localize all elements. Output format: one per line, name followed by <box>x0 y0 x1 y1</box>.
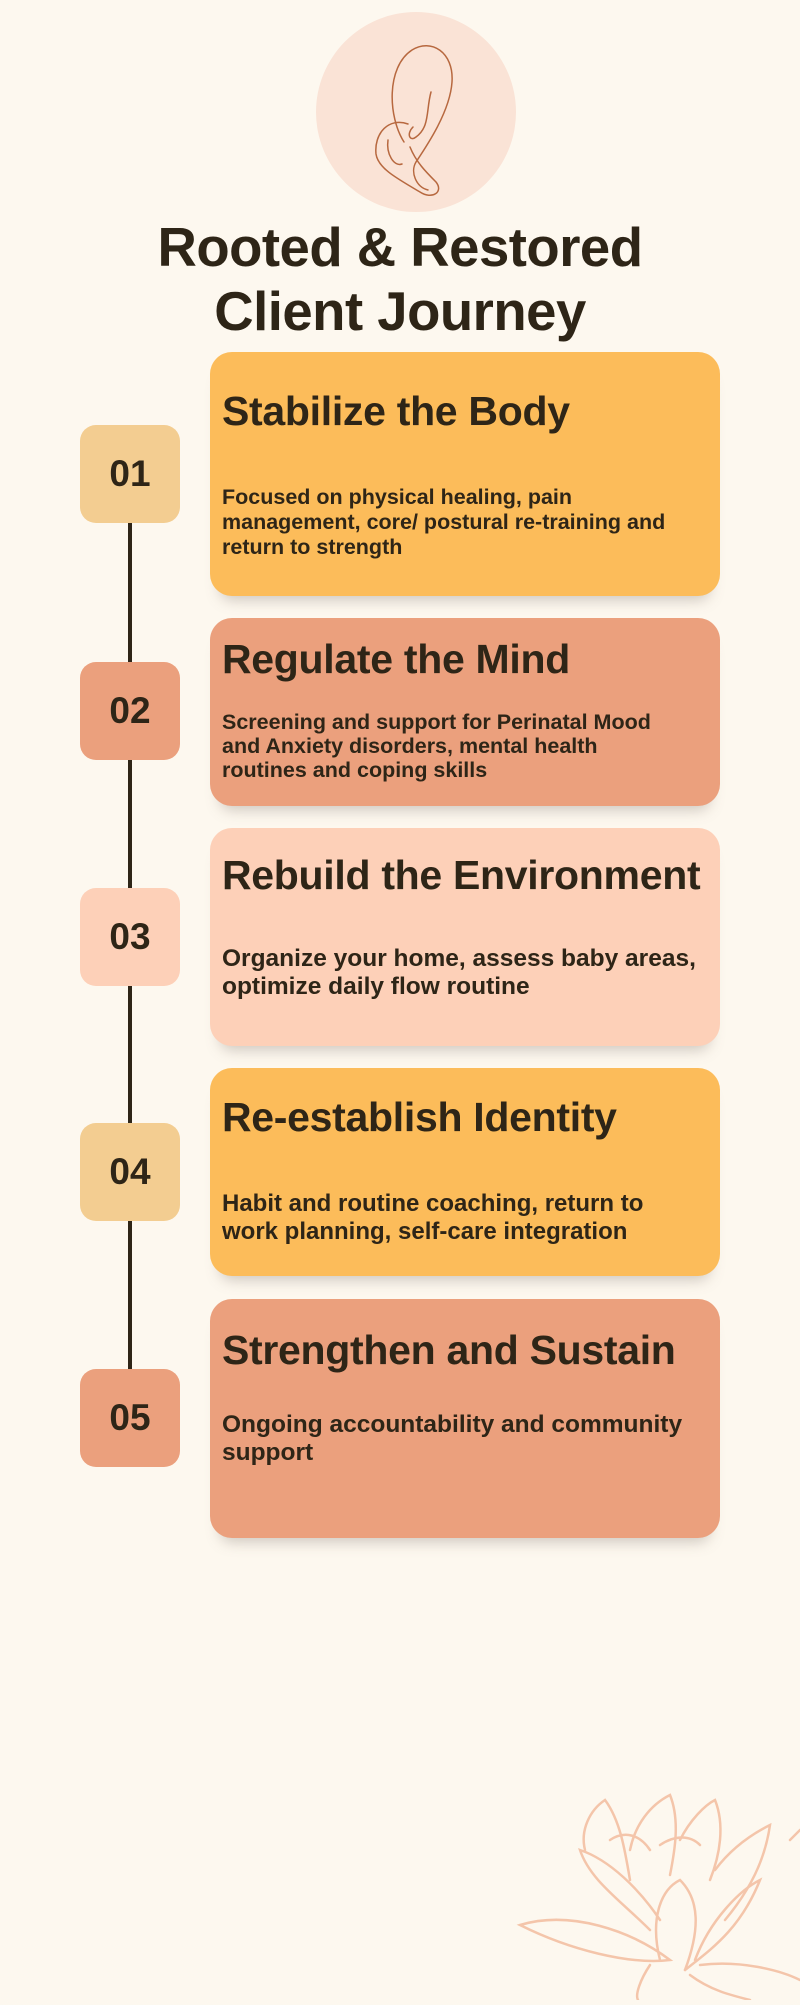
card 3: Rebuild the Environment <box>210 828 720 1046</box>
timeline line <box>128 500 132 1467</box>
card 3: Rebuild the Environment: Organize your home, assess baby areas, optimize daily flow routine <box>222 945 696 1000</box>
step 04 number <box>80 1123 180 1221</box>
card 5: Strengthen and Sustain: Strengthen and Sustain <box>222 1327 676 1373</box>
card 5: Strengthen and Sustain: Ongoing accountability and community support <box>222 1411 682 1466</box>
title: Rooted & Restored <box>157 217 643 278</box>
card 2: Regulate the Mind <box>210 618 720 806</box>
decoration: lotus <box>516 1793 800 2000</box>
step 02 number <box>80 662 180 760</box>
step 05 number <box>80 1369 180 1467</box>
card 1: Stabilize the Body <box>210 352 720 596</box>
card 4: Re-establish Identity: Habit and routine coaching, return to work planning, self-care integration <box>222 1190 643 1245</box>
card 4: Re-establish Identity <box>210 1068 720 1276</box>
step 03 number <box>80 888 180 986</box>
step 03 number: 03 <box>109 916 151 957</box>
card 3: Rebuild the Environment: Rebuild the Environment <box>222 852 700 898</box>
step 01 number: 01 <box>109 453 151 494</box>
step 02 number: 02 <box>109 690 151 731</box>
step 05 number: 05 <box>109 1397 151 1438</box>
icon: mother and baby circle <box>316 12 516 212</box>
title <box>157 217 643 342</box>
card 2: Regulate the Mind: Screening and support for Perinatal Mood and Anxiety disorders, mental health routines and coping skills <box>222 710 651 782</box>
card 5: Strengthen and Sustain <box>210 1299 720 1538</box>
card 4: Re-establish Identity: Re-establish Identity <box>222 1094 617 1140</box>
title: Client Journey <box>214 281 586 342</box>
card 1: Stabilize the Body: Stabilize the Body <box>222 388 570 434</box>
step 01 number <box>80 425 180 523</box>
card 1: Stabilize the Body: Focused on physical healing, pain management, core/ postural re-training and return to strength <box>222 485 665 559</box>
step 04 number: 04 <box>109 1151 151 1192</box>
card 2: Regulate the Mind: Regulate the Mind <box>222 636 570 682</box>
